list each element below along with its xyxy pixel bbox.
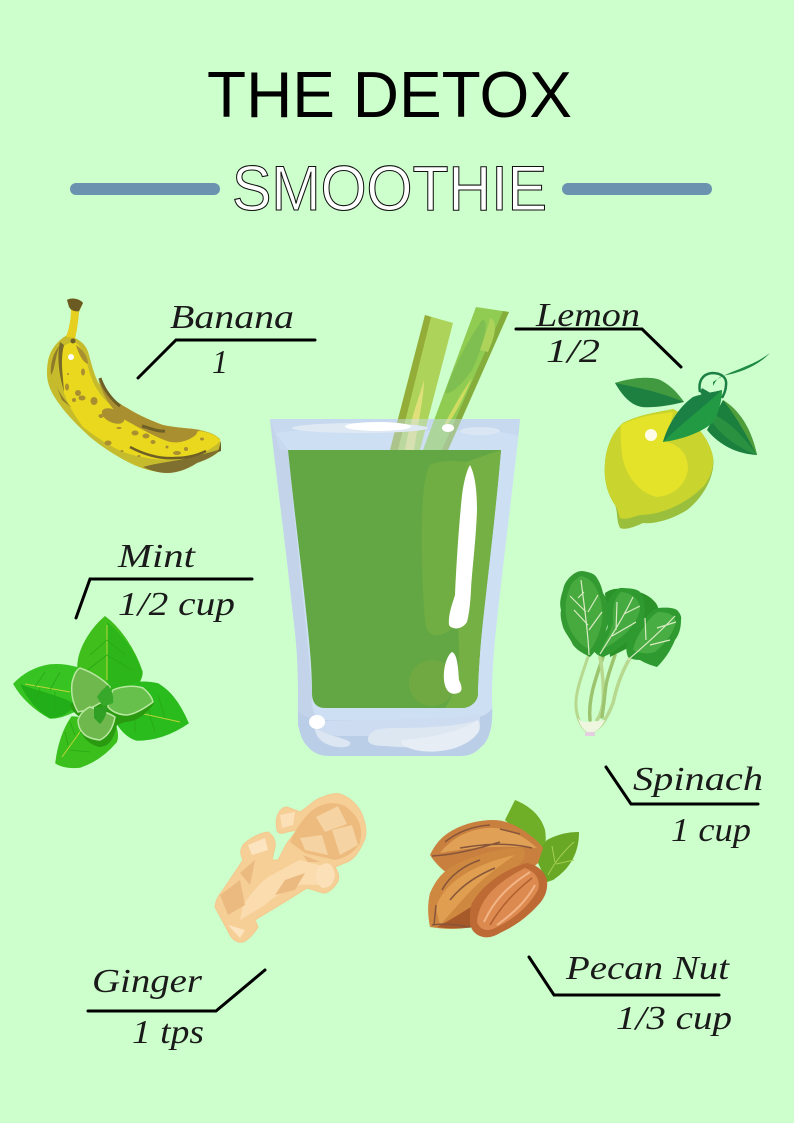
icon: banana [47, 299, 221, 473]
base highlights [315, 728, 350, 747]
spinach middle leaf [593, 588, 645, 657]
label: Mint [76, 538, 252, 623]
mint large leaves [78, 617, 142, 695]
label: Spinach [606, 761, 763, 849]
label: Pecan Nut [529, 950, 732, 1037]
liquid [288, 450, 501, 708]
subtitle: Smoothie with rules [70, 154, 712, 224]
label: Ginger: 1 tps [132, 1014, 204, 1051]
spinach left leaf [560, 571, 609, 657]
icon: mint [14, 617, 188, 767]
spinach stems [576, 655, 630, 733]
icon: pecan nuts [428, 800, 579, 937]
rim highlights [292, 423, 428, 433]
icon: smoothie glass with straws [270, 307, 520, 756]
spinach back leaf [605, 589, 658, 657]
icon: lemon [605, 353, 770, 529]
icon: ginger [215, 794, 366, 942]
banana olive top band [98, 378, 200, 442]
label: Ginger: Ginger [92, 963, 203, 1000]
label: Lemon [516, 297, 681, 370]
straws [390, 315, 453, 450]
label: Banana: 1 [212, 344, 228, 381]
banana yellow band [58, 342, 220, 459]
title: The Detox: THE DETOX [207, 58, 572, 131]
highlights on liquid [449, 465, 477, 628]
glass shading [270, 419, 520, 735]
lemon leaves [615, 378, 684, 407]
label: Lemon: Lemon [535, 297, 640, 334]
subtitle: Smoothie with rules: SMOOTHIE [232, 154, 547, 224]
label: Banana [138, 299, 315, 381]
label: Spinach: 1 cup [671, 812, 751, 849]
label: Lemon: 1/2 [546, 333, 600, 370]
label: Pecan Nut: Pecan Nut [565, 950, 731, 987]
label: Pecan Nut: 1/3 cup [616, 1000, 732, 1037]
label: Ginger [88, 963, 265, 1051]
label: Banana: Banana [170, 299, 294, 336]
mint shadow [70, 698, 155, 747]
mint pale inner leaves [72, 668, 110, 712]
label: Mint: Mint [117, 538, 197, 575]
spinach right leaf [626, 608, 681, 667]
glass body [270, 419, 520, 756]
icon: spinach [560, 571, 681, 736]
label: Spinach: Spinach [633, 761, 763, 798]
label: Mint: 1/2 cup [118, 586, 235, 623]
